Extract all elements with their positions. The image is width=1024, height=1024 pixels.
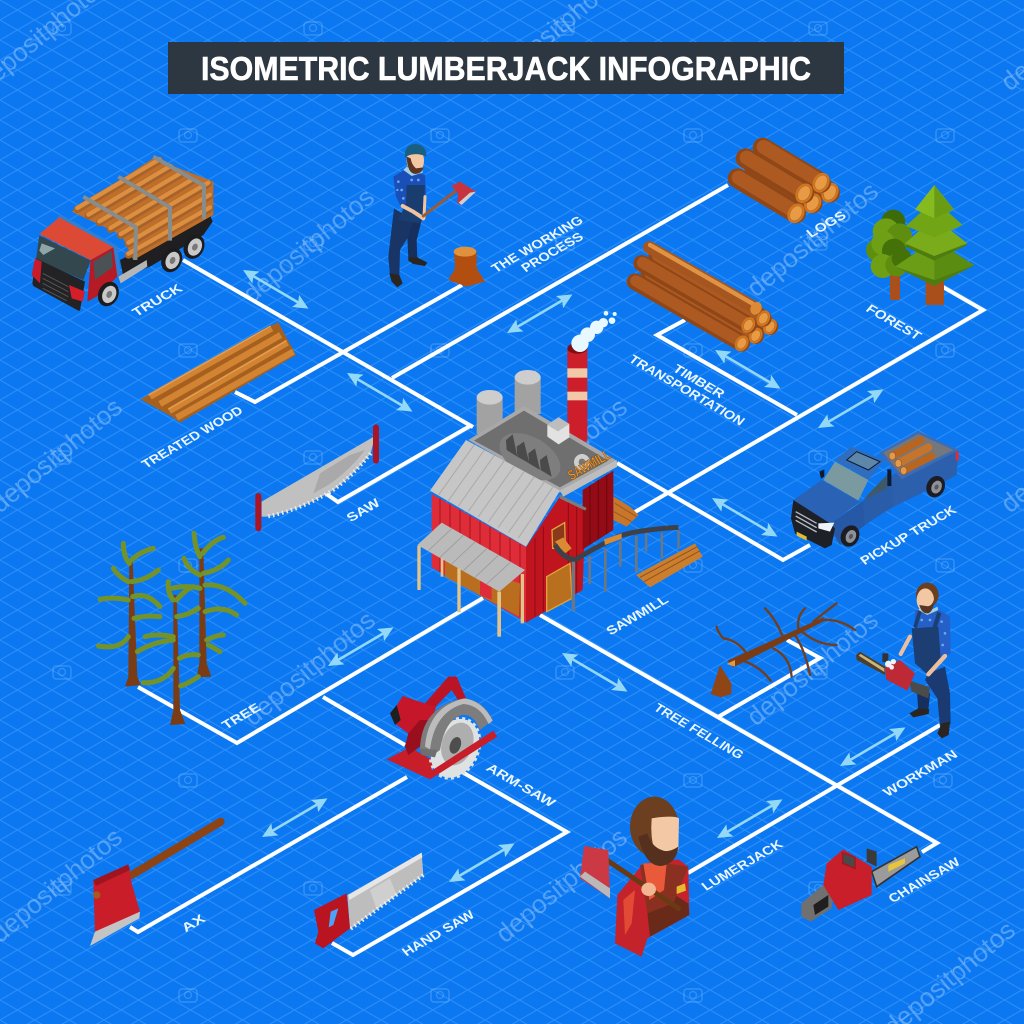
label: arm-saw: ARM-SAW <box>483 761 559 810</box>
watermarks: depositphotos <box>490 392 633 519</box>
icon: worker with axe and stump <box>388 144 485 287</box>
label: saw: SAW <box>343 496 383 524</box>
icon: circular arm saw <box>387 677 497 786</box>
label: treated wood: TREATED WOOD <box>139 403 246 471</box>
label: tree felling: TREE FELLING <box>651 701 747 762</box>
icon: logging truck <box>32 157 213 311</box>
label: hand saw: HAND SAW <box>399 908 478 959</box>
watermarks: depositphotos <box>741 176 884 303</box>
watermarks: depositphotos <box>237 182 380 309</box>
icon: log pile <box>738 147 842 226</box>
icon: chainsaw <box>801 847 920 922</box>
label: lumerjack: LUMERJACK <box>699 837 786 893</box>
icon: ax <box>90 822 221 946</box>
watermarks: depositphotos <box>238 605 381 732</box>
icon: workman with chainsaw <box>856 583 951 738</box>
label: transportation: TRANSPORTATION <box>626 352 748 428</box>
title: ISOMETRIC LUMBERJACK INFOGRAPHIC <box>201 50 811 87</box>
icon: pickup truck <box>791 431 959 550</box>
label: sawmill: SAWMILL <box>603 593 671 638</box>
label: logs: LOGS <box>803 208 849 240</box>
label: timber: TIMBER <box>670 362 728 401</box>
watermarks: depositphotos <box>490 822 633 949</box>
label: tree: TREE <box>219 701 264 732</box>
label: the working: THE WORKING <box>488 213 586 275</box>
icon: two-man saw <box>258 427 376 528</box>
label: truck: TRUCK <box>129 281 186 319</box>
icon: hand saw <box>314 853 423 948</box>
title <box>168 42 844 94</box>
label: ax: AX <box>178 912 208 935</box>
label: pickup truck: PICKUP TRUCK <box>857 503 959 567</box>
icon: sawmill building: SAWMILL <box>565 446 614 483</box>
icon: treated wood <box>141 323 296 423</box>
icon: felled tree and stump <box>711 603 855 697</box>
icon: lumberjack portrait with axe <box>580 797 689 957</box>
icon: forest trees <box>866 185 975 305</box>
label: chainsaw: CHAINSAW <box>885 855 963 905</box>
icon: timber stack <box>635 245 780 354</box>
icon: sawmill building <box>417 311 703 637</box>
label: workman: WORKMAN <box>880 747 960 799</box>
label: process: PROCESS <box>518 230 586 275</box>
icon: trees <box>98 533 245 725</box>
label: forest: FOREST <box>863 302 925 343</box>
watermarks: depositphotos <box>741 605 884 732</box>
connector lines <box>130 185 983 955</box>
double-headed arrows <box>239 264 909 888</box>
